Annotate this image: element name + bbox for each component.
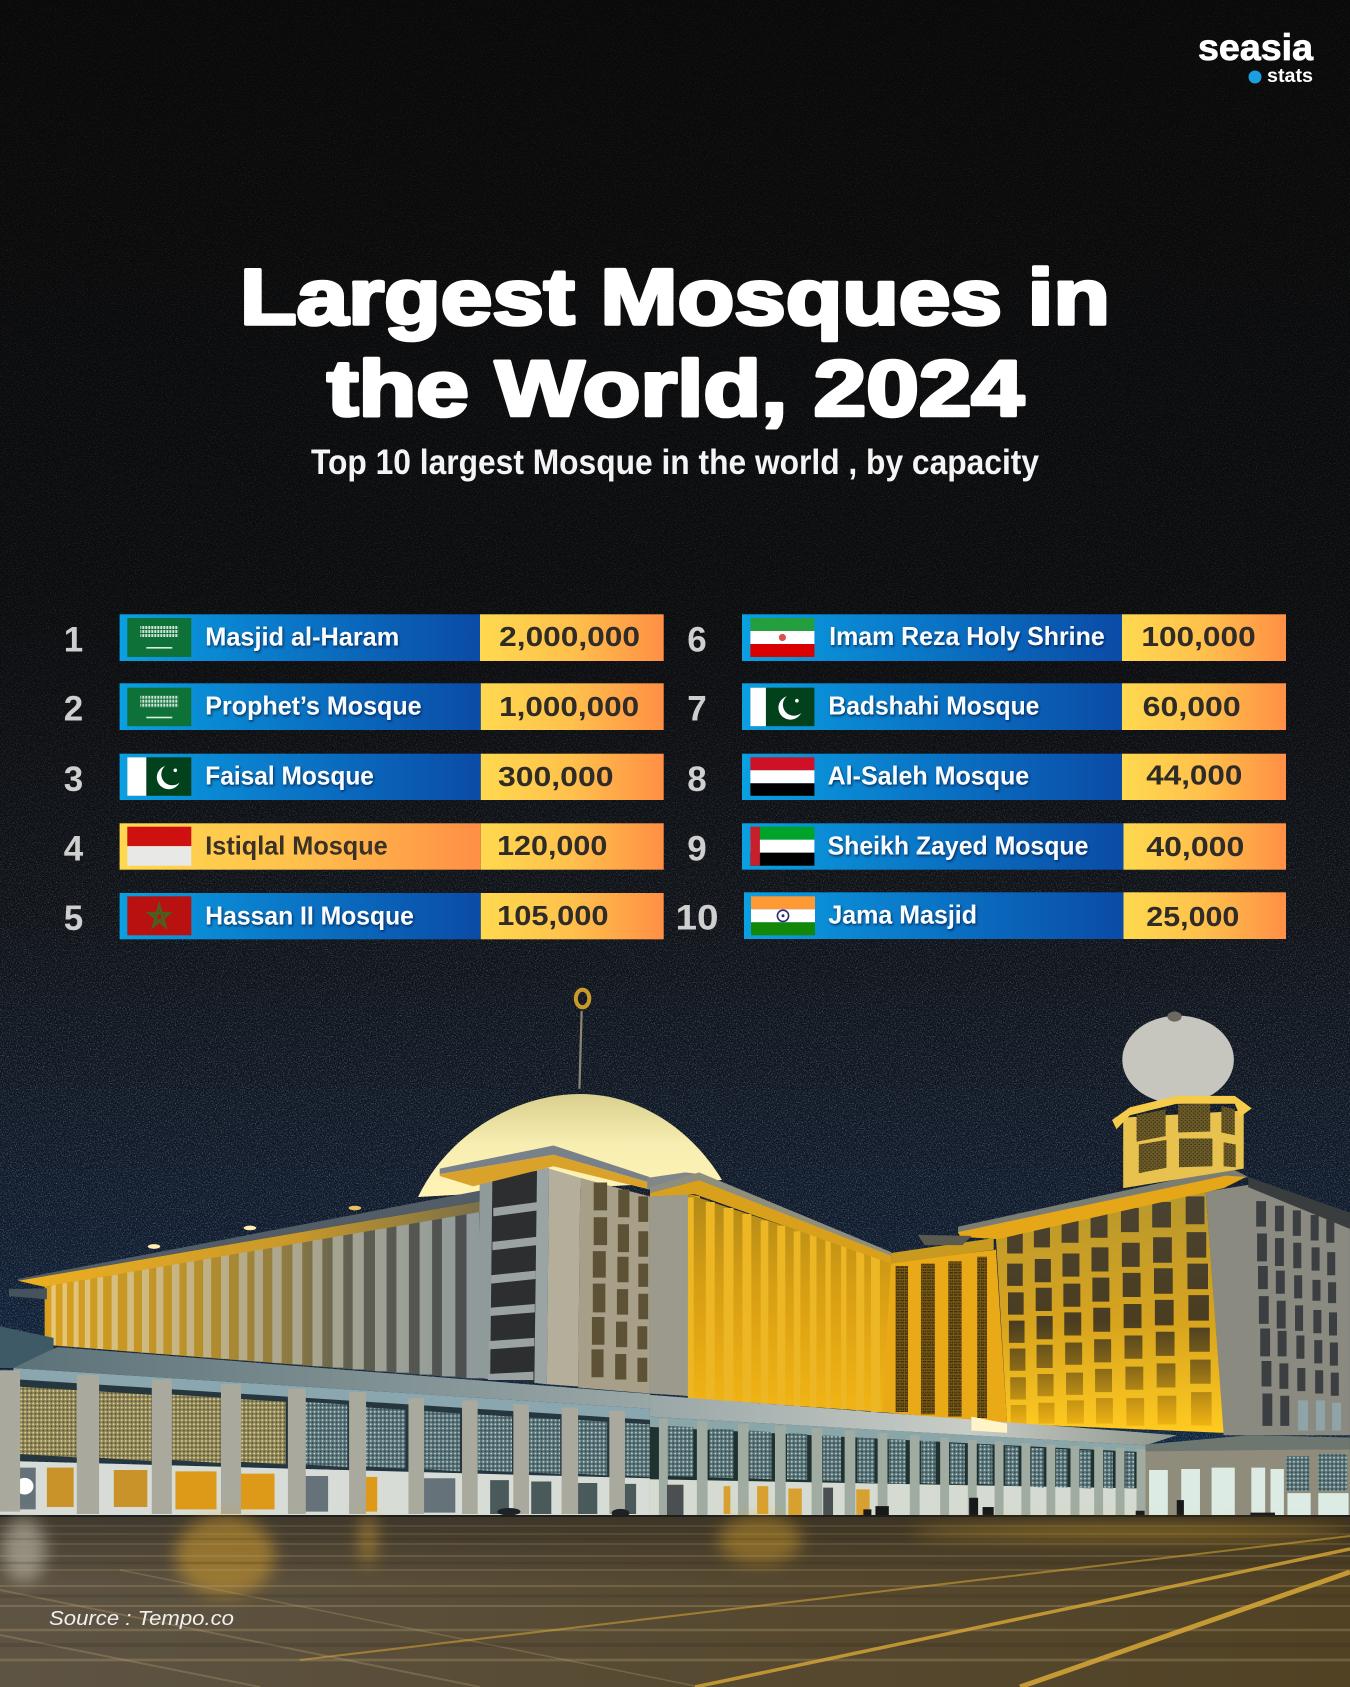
right half of the building bbox=[650, 1011, 1350, 1526]
flag: Saudi Arabia bbox=[127, 688, 191, 726]
row 8: Al-Saleh Mosque: 44,000 bbox=[1146, 759, 1242, 790]
row 1: Masjid al-Haram bbox=[64, 614, 664, 661]
subtitle: Top 10 largest Mosque in the world , by capacity bbox=[311, 443, 1039, 482]
flag: India bbox=[751, 896, 815, 935]
flag: Yemen bbox=[750, 757, 814, 796]
flag: Saudi Arabia bbox=[127, 618, 191, 657]
row 4: Istiqlal Mosque: 4 bbox=[64, 830, 84, 869]
row 6: Imam Reza Holy Shrine: Imam Reza Holy Shrine bbox=[829, 621, 1105, 651]
long prayer hall wing bbox=[9, 1190, 482, 1380]
spire with crescent finial bbox=[576, 990, 589, 1089]
row 5: Hassan II Mosque bbox=[64, 893, 664, 939]
flag: Indonesia bbox=[127, 827, 191, 866]
row 9: Sheikh Zayed Mosque bbox=[687, 823, 1286, 870]
title bbox=[240, 252, 1110, 432]
source note: Source : Tempo.co bbox=[49, 1608, 234, 1630]
title: Largest Mosques in bbox=[240, 252, 1110, 341]
row 3: Faisal Mosque: 300,000 bbox=[498, 761, 614, 792]
flag: Morocco bbox=[127, 896, 191, 935]
light reflections bbox=[2, 1514, 1350, 1596]
row 6: Imam Reza Holy Shrine bbox=[687, 614, 1286, 661]
row 4: Istiqlal Mosque: 120,000 bbox=[497, 830, 607, 861]
row 5: Hassan II Mosque: 5 bbox=[64, 899, 83, 938]
row 10: Jama Masjid: 10 bbox=[676, 898, 718, 937]
row 1: Masjid al-Haram: 1 bbox=[64, 621, 83, 660]
row 1: Masjid al-Haram: Masjid al-Haram bbox=[205, 621, 399, 651]
right minaret bbox=[1112, 1011, 1252, 1188]
row 4: Istiqlal Mosque bbox=[64, 823, 664, 870]
flag: Pakistan bbox=[127, 757, 191, 796]
row 8: Al-Saleh Mosque: 8 bbox=[687, 760, 707, 799]
row 9: Sheikh Zayed Mosque: Sheikh Zayed Mosque bbox=[828, 830, 1088, 860]
ranking table: right column bbox=[676, 614, 1286, 939]
row 8: Al-Saleh Mosque: Al-Saleh Mosque bbox=[828, 760, 1029, 790]
row 9: Sheikh Zayed Mosque: 40,000 bbox=[1146, 831, 1244, 862]
right block side wall bbox=[1206, 1177, 1350, 1435]
row 10: Jama Masjid: 25,000 bbox=[1146, 901, 1239, 932]
ranking table: left column bbox=[64, 614, 664, 939]
logo: seasia stats: seasia bbox=[1198, 27, 1313, 68]
central stair tower bbox=[440, 1145, 700, 1398]
row 6: Imam Reza Holy Shrine: 100,000 bbox=[1141, 621, 1256, 652]
row 3: Faisal Mosque: 3 bbox=[64, 760, 83, 799]
colonnade with lattice screens bbox=[0, 1326, 651, 1517]
row 7: Badshahi Mosque: 7 bbox=[687, 690, 707, 729]
flag: Iran bbox=[750, 618, 814, 657]
visitors on the plaza bbox=[863, 1498, 1275, 1526]
title: the World, 2024 bbox=[327, 344, 1024, 432]
row 3: Faisal Mosque bbox=[64, 754, 664, 800]
row 7: Badshahi Mosque: 60,000 bbox=[1143, 691, 1241, 722]
row 5: Hassan II Mosque: 105,000 bbox=[497, 900, 608, 931]
row 7: Badshahi Mosque bbox=[687, 683, 1286, 730]
row 4: Istiqlal Mosque: Istiqlal Mosque bbox=[205, 830, 388, 860]
flag: UAE bbox=[750, 827, 814, 866]
main dome bbox=[418, 1094, 722, 1197]
plaza floor bbox=[0, 1514, 1350, 1687]
row 7: Badshahi Mosque: Badshahi Mosque bbox=[828, 690, 1039, 720]
central yellow section with lattice bbox=[880, 1235, 1007, 1424]
row 2: Prophet's Mosque: 2 bbox=[64, 690, 83, 729]
prayer hall east wing bbox=[650, 1172, 891, 1412]
right block illuminated facade bbox=[958, 1168, 1248, 1433]
row 8: Al-Saleh Mosque bbox=[687, 754, 1286, 800]
flag: Pakistan bbox=[750, 688, 814, 726]
illustration: Istiqlal Mosque at night bbox=[0, 990, 1350, 1687]
east block ground floor bbox=[1146, 1435, 1350, 1520]
paving lines bbox=[0, 1526, 1350, 1687]
left half of the building bbox=[0, 990, 700, 1517]
row 2: Prophet's Mosque bbox=[64, 683, 664, 730]
row 1: Masjid al-Haram: 2,000,000 bbox=[499, 621, 640, 652]
row 3: Faisal Mosque: Faisal Mosque bbox=[205, 760, 374, 790]
row 6: Imam Reza Holy Shrine: 6 bbox=[687, 621, 707, 660]
row 2: Prophet's Mosque: 1,000,000 bbox=[499, 691, 639, 722]
row 10: Jama Masjid bbox=[676, 892, 1286, 939]
row 10: Jama Masjid: Jama Masjid bbox=[828, 899, 977, 929]
row 2: Prophet's Mosque: Prophet’s Mosque bbox=[205, 690, 422, 720]
logo: seasia stats bbox=[1198, 27, 1313, 87]
east colonnade bbox=[650, 1395, 1177, 1520]
row 5: Hassan II Mosque: Hassan II Mosque bbox=[205, 900, 414, 930]
row 9: Sheikh Zayed Mosque: 9 bbox=[687, 830, 707, 869]
logo: seasia stats: stats bbox=[1267, 66, 1313, 87]
